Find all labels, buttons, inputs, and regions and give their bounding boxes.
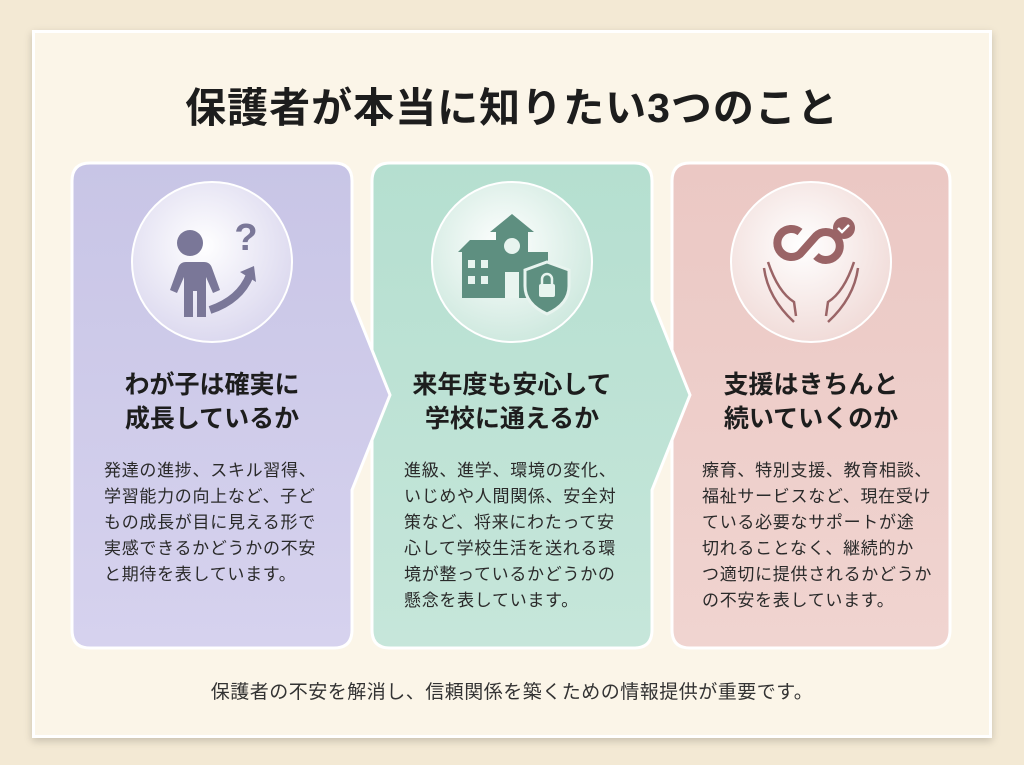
body: panel 3: ている必要なサポートが途	[702, 513, 914, 532]
icon: school with shield	[432, 182, 592, 342]
icon: hands with cycle	[731, 182, 891, 342]
footer text: 保護者の不安を解消し、信頼関係を築くための情報提供が重要です。	[211, 682, 813, 703]
heading: panel 3	[723, 371, 898, 433]
body: panel 3	[702, 461, 932, 610]
body: panel 2: 心して学校生活を送れる環	[404, 539, 616, 558]
body: panel 1: もの成長が目に見える形で	[104, 513, 316, 532]
heading: panel 3: 支援はきちんと	[723, 371, 898, 399]
heading: panel 1	[124, 371, 300, 433]
body: panel 2: 策など、将来にわたって安	[404, 513, 615, 532]
heading: panel 2: 学校に通えるか	[425, 405, 599, 433]
body: panel 2: 懸念を表しています。	[404, 591, 579, 610]
heading: panel 1: 成長しているか	[125, 405, 299, 433]
body: panel 2: いじめや人間関係、安全対	[404, 487, 616, 506]
body: panel 3: 療育、特別支援、教育相談、	[702, 461, 932, 480]
body: panel 2: 進級、進学、環境の変化、	[404, 461, 616, 480]
body: panel 3: つ適切に提供されるかどうか	[702, 565, 932, 584]
body: panel 3: 福祉サービスなど、現在受け	[702, 487, 931, 506]
body: panel 2	[404, 461, 616, 610]
icon: child growth	[132, 182, 292, 342]
body: panel 3: の不安を表しています。	[702, 591, 894, 610]
panel: pink	[672, 163, 950, 648]
heading: panel 3: 続いていくのか	[724, 405, 898, 433]
body: panel 1: 発達の進捗、スキル習得、	[104, 461, 316, 480]
title: 保護者が本当に知りたい3つのこと	[185, 85, 839, 131]
heading: panel 2: 来年度も安心して	[412, 371, 612, 399]
body: panel 1: 実感できるかどうかの不安	[104, 539, 316, 558]
panel: green	[372, 163, 690, 648]
body: panel 1	[104, 461, 316, 584]
heading: panel 2	[412, 371, 612, 433]
body: panel 2: 境が整っているかどうかの	[404, 565, 616, 584]
icon: child growth: ?	[234, 217, 258, 259]
body: panel 1: と期待を表しています。	[104, 565, 296, 584]
panel: purple	[72, 163, 390, 648]
heading: panel 1: わが子は確実に	[124, 371, 300, 399]
body: panel 1: 学習能力の向上など、子ど	[104, 487, 316, 506]
body: panel 3: 切れることなく、継続的か	[702, 539, 914, 558]
